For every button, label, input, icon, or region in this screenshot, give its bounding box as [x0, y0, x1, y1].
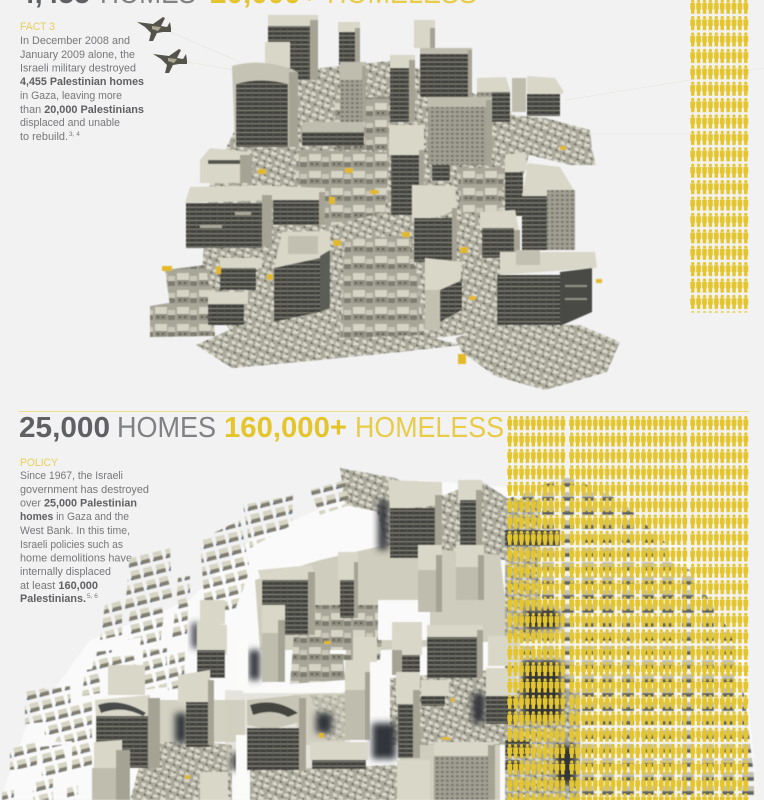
- rear towers: [258, 480, 484, 635]
- text block: policy: homes in Gaza and the: [20, 511, 129, 523]
- yellow bulldozers: [185, 641, 455, 779]
- icon: fighter jet 1: [137, 17, 171, 41]
- small houses under the people grid: [505, 476, 757, 800]
- soft shadows: [175, 500, 576, 785]
- yellow bulldozers: [162, 146, 602, 364]
- people grid: 160,000+ homeless: [507, 416, 749, 800]
- text block: fact 3: January 2009 alone, the: [20, 49, 135, 61]
- front towers: [274, 231, 597, 330]
- text block: fact 3: 4,455 Palestinian homes: [20, 76, 144, 88]
- left low blocks: [185, 148, 325, 248]
- foreground towers: [92, 740, 495, 800]
- text block: fact 3: in Gaza, leaving more: [20, 90, 122, 102]
- text block: policy: over 25,000 Palestinian: [20, 498, 137, 510]
- text block: fact 3: displaced and unable: [20, 117, 120, 129]
- heading: 25,000 homes, 160,000+ homeless: 160,000+: [224, 412, 347, 444]
- back row towers: [268, 15, 472, 97]
- text block: fact 3: to rebuild.: [20, 131, 68, 143]
- text block: fact 3: [20, 21, 144, 143]
- text block: policy: [20, 457, 149, 605]
- text block: policy: government has destroyed: [20, 484, 149, 496]
- text block: fact 3: Israeli military destroyed: [20, 62, 136, 74]
- text block: policy: 5, 6: [87, 593, 98, 600]
- rubble and small houses: [150, 60, 620, 390]
- text block: policy: Since 1967, the Israeli: [20, 470, 123, 482]
- text block: policy: Israeli policies such as: [20, 539, 123, 551]
- heading: 25,000 homes, 160,000+ homeless: HOMELESS: [355, 412, 504, 444]
- city model: West Bank and Gaza demolitions: [0, 468, 757, 800]
- people grid: 20,000+ homeless: [690, 0, 749, 313]
- bomber flight trails: [170, 32, 764, 134]
- text block: fact 3: than 20,000 Palestinians: [20, 104, 144, 116]
- divider rule: [19, 411, 749, 412]
- icon: fighter jet 2: [153, 49, 187, 73]
- beige city blocks and rubble: [130, 468, 515, 800]
- pale ground: [0, 480, 757, 800]
- text block: fact 3: In December 2008 and: [20, 35, 130, 47]
- front towers: [95, 660, 516, 770]
- text block: policy: at least 160,000: [20, 580, 98, 592]
- heading: 25,000 homes, 160,000+ homeless: 25,000: [19, 412, 110, 444]
- mid row towers: [232, 42, 564, 147]
- white roads: [236, 640, 346, 800]
- text block: policy: Palestinians.: [20, 593, 86, 605]
- heading: 25,000 homes, 160,000+ homeless: HOMES: [117, 412, 216, 444]
- towers under the people grid: [505, 530, 560, 770]
- text block: policy: internally displaced: [20, 566, 111, 578]
- text block: fact 3: FACT 3: [20, 21, 55, 33]
- small houses clusters: [2, 480, 350, 800]
- text block: policy: West Bank. In this time,: [20, 525, 130, 537]
- heading: 25,000 homes, 160,000+ homeless: [19, 412, 504, 444]
- city model: partially destroyed Gaza neighbourhood: [150, 15, 620, 390]
- heading: 4,455 homes, 20,000+ homeless: [19, 0, 477, 10]
- centre towers: [389, 97, 575, 250]
- middle towers: [197, 600, 520, 682]
- small buildings in the street: [208, 185, 520, 325]
- text block: policy: home demolitions have: [20, 552, 132, 564]
- text block: fact 3: 3, 4: [69, 131, 80, 138]
- text block: policy: POLICY: [20, 457, 59, 469]
